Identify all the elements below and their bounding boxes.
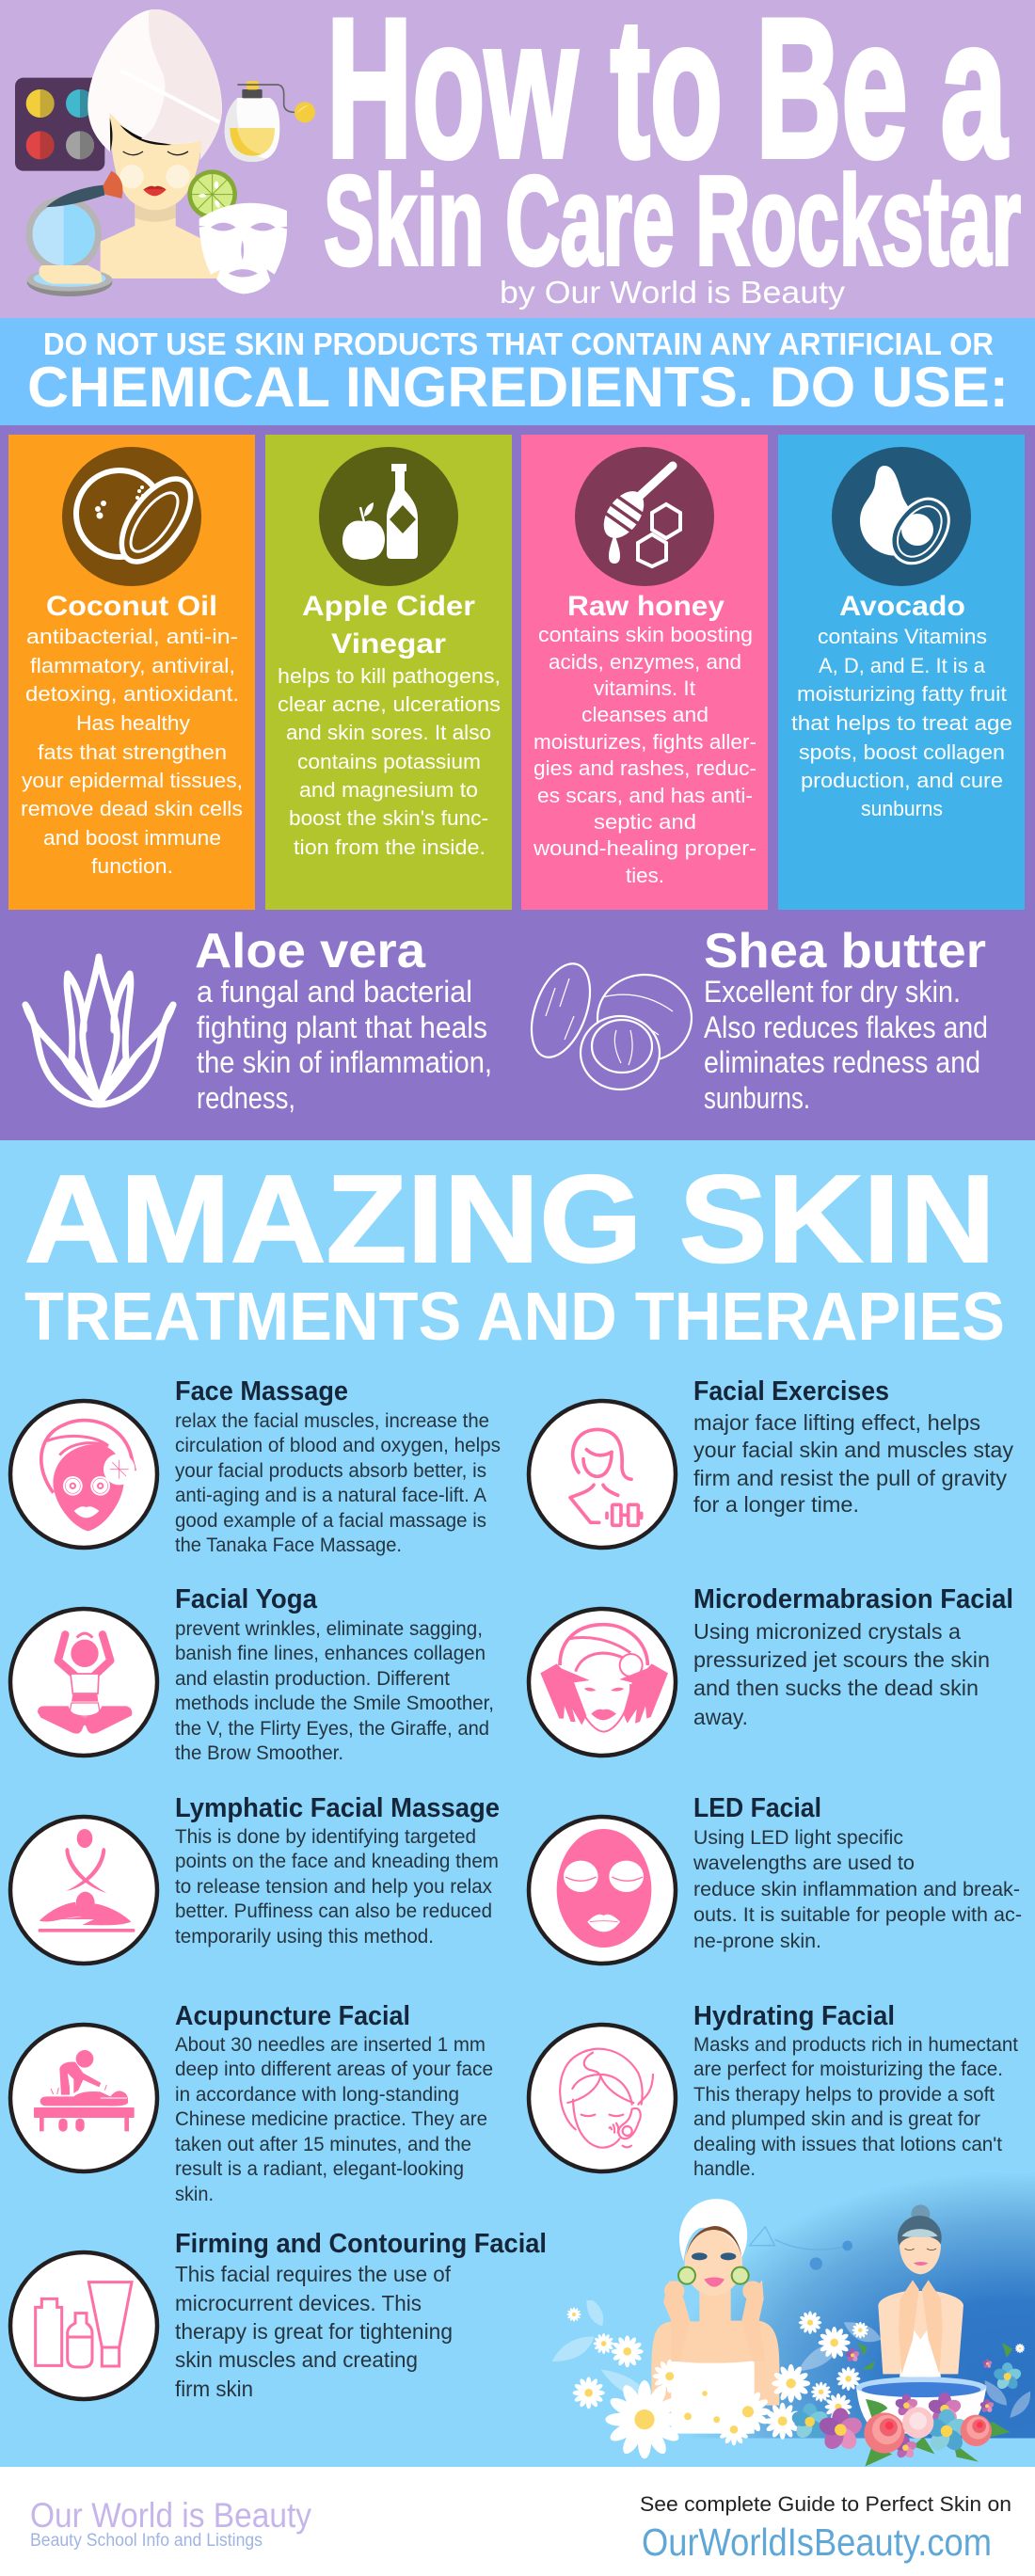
text: raw honey description: es scars, and has anti- xyxy=(537,784,753,807)
header panel background xyxy=(0,0,1035,318)
text: led facial description: wavelengths are used to xyxy=(693,1852,915,1874)
text: apple cider vinegar description: contains potassium xyxy=(297,750,481,773)
text: microdermabrasion description xyxy=(693,1619,990,1729)
woman figure xyxy=(88,9,226,278)
treatment: lymphatic facial massage xyxy=(10,1793,500,1964)
text: raw honey description: septic and xyxy=(594,810,696,834)
text: facial exercises description: firm and resist the pull of gravity xyxy=(693,1466,1008,1490)
text: hydrating facial description: are perfect for moisturizing the face. xyxy=(693,2059,1003,2080)
treatment: led facial xyxy=(529,1793,1022,1964)
text: raw honey description: moisturizes, fights aller- xyxy=(533,730,756,754)
text: apple cider vinegar description: clear acne, ulcerations xyxy=(278,692,501,716)
heading: avocado: Avocado xyxy=(839,591,965,622)
text: aloe vera description: a fungal and bacterial xyxy=(197,975,472,1009)
heading: apple cider vinegar xyxy=(302,591,475,660)
icon: woman with hydrating device xyxy=(529,2025,676,2171)
text: firming description: firm skin xyxy=(175,2377,253,2401)
text: avocado description: that helps to treat age xyxy=(791,711,1012,735)
text: coconut oil description: Has healthy xyxy=(76,711,191,735)
treatment: facial exercises xyxy=(529,1376,1013,1548)
text: shea butter description: sunburns. xyxy=(704,1081,810,1115)
icon: perfume bottle xyxy=(225,81,315,162)
text: raw honey description: vitamins. It xyxy=(594,676,696,700)
text: firming description: skin muscles and creating xyxy=(175,2347,418,2372)
text: acupuncture description: result is a radiant, elegant-looking xyxy=(175,2158,464,2180)
text: hydrating facial description: handle. xyxy=(693,2158,756,2180)
title xyxy=(324,0,1021,292)
banner: do not use artificial ingredients: CHEMICAL INGREDIENTS. DO USE: xyxy=(27,356,1009,419)
text: face massage description: your facial products absorb better, is xyxy=(175,1460,486,1482)
text: hydrating facial description xyxy=(693,2034,1018,2180)
icon: cosmetic products xyxy=(10,2252,157,2399)
heading: apple cider vinegar: Apple Cider xyxy=(302,591,475,622)
text: facial yoga description xyxy=(175,1618,494,1764)
text: hydrating facial description: dealing with issues that lotions can't xyxy=(693,2134,1002,2155)
text: face massage description: relax the facial muscles, increase the xyxy=(175,1410,489,1432)
text: microdermabrasion description: away. xyxy=(693,1705,748,1729)
heading: amazing skin treatments and therapies xyxy=(24,1150,1005,1355)
text: firming description: This facial requires the use of xyxy=(175,2262,452,2286)
text: apple cider vinegar description: boost the skin's func- xyxy=(289,806,488,830)
text: avocado description: sunburns xyxy=(861,797,943,820)
illustration: woman with towel and skin care items xyxy=(15,9,315,296)
text: raw honey description: gies and rashes, reduc- xyxy=(533,756,756,780)
icon: mirror compact xyxy=(27,199,112,296)
coloured flowers and roses xyxy=(790,2348,1023,2459)
heading: apple cider vinegar: Vinegar xyxy=(331,628,446,660)
text: led facial description: ne-prone skin. xyxy=(693,1931,821,1952)
text: acupuncture description: skin. xyxy=(175,2184,214,2205)
heading: led facial: LED Facial xyxy=(693,1793,821,1823)
water bowl xyxy=(856,2377,986,2434)
text: facial yoga description: the V, the Flirty Eyes, the Giraffe, and xyxy=(175,1718,489,1740)
pale leaves xyxy=(552,2300,1030,2418)
text: apple cider vinegar description: and magnesium to xyxy=(299,778,478,802)
heading: hydrating facial: Hydrating Facial xyxy=(693,2001,895,2031)
illustration: women with cucumber slices, bowl and flowers xyxy=(546,2173,1035,2467)
text: coconut oil description: detoxing, antioxidant. xyxy=(25,682,239,706)
text: lymphatic massage description: to release tension and help you relax xyxy=(175,1876,492,1898)
treatment: facial yoga xyxy=(10,1584,494,1764)
icon: mask xyxy=(529,1817,676,1964)
woman washing face xyxy=(878,2204,963,2377)
heading: amazing skin treatments and therapies: TREATMENTS AND THERAPIES xyxy=(24,1280,1005,1355)
text: avocado description: moisturizing fatty fruit xyxy=(797,682,1008,706)
text: lymphatic massage description: temporarily using this method. xyxy=(175,1926,434,1948)
text: led facial description: Using LED light specific xyxy=(693,1827,903,1849)
text: coconut oil description: your epidermal tissues, xyxy=(22,769,243,792)
text: raw honey description: ties. xyxy=(626,864,664,887)
text: lymphatic massage description xyxy=(175,1826,499,1948)
text: microdermabrasion description: Using micronized crystals a xyxy=(693,1619,961,1644)
icon: lime slice xyxy=(187,169,237,219)
heading: coconut oil: Coconut Oil xyxy=(46,591,217,622)
logo: our world is beauty xyxy=(30,2496,311,2551)
panel: aloe vera xyxy=(25,924,492,1115)
text: apple cider vinegar description xyxy=(278,664,501,859)
icon: shea nuts xyxy=(520,956,692,1089)
text: led facial description: reduce skin inflammation and break- xyxy=(693,1879,1020,1900)
text: aloe vera description xyxy=(197,975,492,1115)
text: apple cider vinegar description: and skin sores. It also xyxy=(286,721,491,744)
heading: lymphatic facial massage: Lymphatic Facial Massage xyxy=(175,1793,500,1823)
icon: honey dipper and honeycomb xyxy=(575,447,714,586)
panel: coconut oil xyxy=(8,435,255,910)
text: hydrating facial description: and plumped skin and is great for xyxy=(693,2108,980,2130)
text: face massage description: circulation of blood and oxygen, helps xyxy=(175,1435,501,1456)
heading: face massage: Face Massage xyxy=(175,1376,348,1407)
treatment: firming and contouring facial xyxy=(10,2229,547,2401)
text: coconut oil description xyxy=(21,625,243,878)
treatment: microdermabrasion facial xyxy=(529,1584,1013,1756)
icon: coconut xyxy=(62,447,204,586)
text: hydrating facial description: Masks and products rich in humectant xyxy=(693,2034,1018,2056)
icon: apple and bottle xyxy=(319,447,458,586)
text: hydrating facial description: This therapy helps to provide a soft xyxy=(693,2084,995,2106)
panel: avocado xyxy=(778,435,1025,910)
text: shea butter description: eliminates redness and xyxy=(704,1045,980,1079)
logo: our world is beauty: Our World is Beauty xyxy=(30,2496,311,2535)
heading: shea butter: Shea butter xyxy=(704,924,986,978)
icon: makeup brush xyxy=(46,171,122,207)
text: aloe vera description: the skin of inflammation, xyxy=(197,1045,492,1079)
bottom strip xyxy=(677,2439,1035,2467)
banner: do not use artificial ingredients: DO NOT USE SKIN PRODUCTS THAT CONTAIN ANY ARTIFICIAL OR xyxy=(43,326,994,361)
panel: apple cider vinegar xyxy=(265,435,512,910)
heading: amazing skin treatments and therapies: AMAZING SKIN xyxy=(24,1150,995,1288)
text: facial yoga description: and elastin production. Different xyxy=(175,1668,450,1690)
panel: raw honey xyxy=(521,435,768,910)
text: firming description: microcurrent devices. This xyxy=(175,2291,422,2315)
byline: by Our World is Beauty xyxy=(500,275,846,310)
text: shea butter description: Excellent for dry skin. xyxy=(704,975,961,1009)
text: acupuncture description xyxy=(175,2034,493,2205)
call to action: full guide xyxy=(640,2492,1011,2564)
text: facial exercises description: your facial skin and muscles stay xyxy=(693,1438,1013,1462)
text: shea butter description: Also reduces flakes and xyxy=(704,1010,988,1044)
text: coconut oil description: flammatory, antiviral, xyxy=(30,654,235,677)
heading: facial yoga: Facial Yoga xyxy=(175,1584,318,1614)
text: facial yoga description: the Brow Smoother. xyxy=(175,1742,343,1764)
text: facial exercises description: major face lifting effect, helps xyxy=(693,1410,980,1435)
text: led facial description xyxy=(693,1827,1022,1952)
heading: raw honey: Raw honey xyxy=(567,591,724,622)
icon: acupuncture table xyxy=(10,2025,157,2171)
text: face massage description: the Tanaka Face Massage. xyxy=(175,1534,402,1556)
text: facial yoga description: prevent wrinkles, eliminate sagging, xyxy=(175,1618,483,1640)
icon: avocado xyxy=(832,447,971,586)
icon: face mask with flower xyxy=(10,1401,157,1548)
text: facial yoga description: banish fine lines, enhances collagen xyxy=(175,1643,486,1664)
heading: aloe vera: Aloe vera xyxy=(195,924,426,978)
text: apple cider vinegar description: tion from the inside. xyxy=(294,835,486,859)
heading: facial exercises: Facial Exercises xyxy=(693,1376,889,1407)
text: coconut oil description: remove dead skin cells xyxy=(21,797,243,820)
text: lymphatic massage description: points on the face and kneading them xyxy=(175,1851,499,1872)
icon: white sheet face mask xyxy=(199,203,287,294)
purple ingredients section background xyxy=(0,425,1035,1140)
text: acupuncture description: taken out after 15 minutes, and the xyxy=(175,2134,471,2155)
icon: aloe plant xyxy=(25,957,173,1105)
icon: woman with dumbbell xyxy=(529,1401,676,1548)
logo: our world is beauty: Beauty School Info and Listings xyxy=(30,2531,263,2551)
treatment: acupuncture facial xyxy=(10,2001,493,2205)
text: microdermabrasion description: and then sucks the dead skin xyxy=(693,1676,979,1700)
text: coconut oil description: fats that strengthen xyxy=(38,740,227,764)
leaves xyxy=(858,2343,1012,2467)
text: lymphatic massage description: better. Puffiness can also be reduced xyxy=(175,1900,492,1922)
heading: microdermabrasion facial: Microdermabrasion Facial xyxy=(693,1584,1013,1614)
text: avocado description: production, and cure xyxy=(801,769,1003,792)
panel: shea butter xyxy=(520,924,988,1115)
text: avocado description xyxy=(791,625,1012,820)
text: firming description: therapy is great for tightening xyxy=(175,2319,453,2344)
banner: do not use artificial ingredients xyxy=(0,318,1035,425)
treatment: face massage xyxy=(10,1376,501,1556)
text: led facial description: outs. It is suitable for people with ac- xyxy=(693,1904,1022,1926)
text: acupuncture description: About 30 needles are inserted 1 mm xyxy=(175,2034,486,2056)
icon: hands on face xyxy=(529,1609,676,1756)
text: raw honey description: contains skin boosting xyxy=(538,623,753,646)
text: firming description xyxy=(175,2262,453,2401)
text: face massage description: good example of a facial massage is xyxy=(175,1510,486,1532)
text: coconut oil description: and boost immune xyxy=(43,826,221,850)
text: face massage description: anti-aging and is a natural face-lift. A xyxy=(175,1485,486,1506)
text: acupuncture description: deep into different areas of your face xyxy=(175,2059,493,2080)
daisies xyxy=(566,2307,1025,2458)
text: facial exercises description: for a longer time. xyxy=(693,1492,859,1517)
text: apple cider vinegar description: helps to kill pathogens, xyxy=(278,664,501,688)
text: shea butter description xyxy=(704,975,988,1115)
text: avocado description: contains Vitamins xyxy=(818,625,987,648)
woman with cucumber slices xyxy=(651,2199,779,2434)
call to action: full guide: See complete Guide to Perfect Skin on xyxy=(640,2492,1011,2516)
text: raw honey description xyxy=(533,623,756,887)
heading: firming and contouring facial: Firming and Contouring Facial xyxy=(175,2229,547,2259)
text: raw honey description: wound-healing proper- xyxy=(533,836,756,860)
text: face massage description xyxy=(175,1410,501,1556)
text: avocado description: A, D, and E. It is a xyxy=(819,654,985,677)
icon: eyeshadow palette xyxy=(15,78,104,171)
text: facial exercises description xyxy=(693,1410,1013,1517)
text: raw honey description: acids, enzymes, and xyxy=(549,650,741,674)
footer xyxy=(0,2467,1035,2576)
icon: lymphatic massage xyxy=(10,1817,157,1964)
text: coconut oil description: antibacterial, anti-in- xyxy=(26,625,238,648)
text: lymphatic massage description: This is done by identifying targeted xyxy=(175,1826,476,1848)
text: acupuncture description: in accordance with long-standing xyxy=(175,2084,459,2106)
icon: yoga pose xyxy=(10,1609,157,1756)
text: raw honey description: cleanses and xyxy=(581,703,709,726)
background swirl xyxy=(750,2227,844,2250)
text: microdermabrasion description: pressurized jet scours the skin xyxy=(693,1647,990,1672)
heading: acupuncture facial: Acupuncture Facial xyxy=(175,2001,410,2031)
treatment: hydrating facial xyxy=(529,2001,1018,2180)
call to action: full guide: OurWorldIsBeauty.com xyxy=(642,2520,992,2564)
text: avocado description: spots, boost collagen xyxy=(799,740,1005,764)
treatments section background xyxy=(0,1140,1035,2467)
text: aloe vera description: redness, xyxy=(197,1081,295,1115)
text: aloe vera description: fighting plant that heals xyxy=(197,1010,487,1044)
text: acupuncture description: Chinese medicine practice. They are xyxy=(175,2108,487,2130)
text: coconut oil description: function. xyxy=(91,854,173,878)
text: facial yoga description: methods include the Smile Smoother, xyxy=(175,1693,494,1714)
